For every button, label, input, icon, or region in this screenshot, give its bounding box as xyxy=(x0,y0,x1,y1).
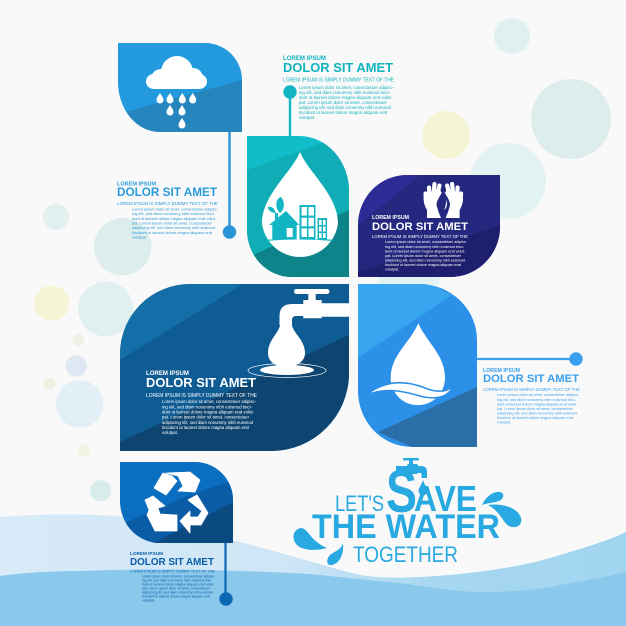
text block: right: Lorem ipsum dolor sit amet, consectetuer adipisc- xyxy=(497,393,580,397)
text block: bottom left: pat. Lorem ipsum dolor sit amet, consectetuer xyxy=(142,586,211,590)
text block: faucet panel xyxy=(146,370,258,435)
text block: left: adipiscing elit, sed diam nonummy nibh euismod xyxy=(132,225,215,230)
text block: faucet panel: DOLOR SIT AMET xyxy=(146,375,256,390)
text block: top center: volutpat. xyxy=(299,115,315,120)
text block: faucet panel: dunt ut laoreet dolore magna aliquam erat volut- xyxy=(162,410,255,414)
text block: left: LOREM IPSUM IS SIMPLY DUMMY TEXT OF THE xyxy=(117,201,218,206)
text block: right: volutpat. xyxy=(497,420,511,424)
text block: right: dunt ut laoreet dolore magna aliquam erat volut- xyxy=(497,402,578,406)
panel: recycle leaf xyxy=(120,462,233,543)
icon: rain cloud xyxy=(146,56,207,128)
text block: left: ing elit, sed diam nonummy nibh euismod tinci- xyxy=(132,211,216,216)
text block: top center: LOREM IPSUM IS SIMPLY DUMMY TEXT OF THE xyxy=(283,78,395,84)
text block: bottom left: volutpat. xyxy=(142,598,155,602)
text block: navy panel xyxy=(372,215,468,272)
text block: faucet panel: pat. Lorem ipsum dolor sit amet, consectetuer xyxy=(162,415,250,420)
text block: top center: pat. Lorem ipsum dolor sit amet, consectetuer xyxy=(299,100,388,105)
text block: top center: LOREM IPSUM xyxy=(283,55,326,62)
text block: top center: ing elit, sed diam nonummy nibh euismod tinci- xyxy=(299,90,391,95)
icon: faucet on S xyxy=(396,458,427,478)
text block: bottom left: Lorem ipsum dolor sit amet, consectetuer adipisc- xyxy=(142,574,215,578)
text block: navy panel: pat. Lorem ipsum dolor sit amet, consectetuer xyxy=(385,254,462,258)
text block: right: adipiscing elit, sed diam nonummy nibh euismod xyxy=(497,411,577,415)
text block: navy panel: LOREM IPSUM IS SIMPLY DUMMY TEXT OF THE xyxy=(372,234,468,239)
text block: faucet panel: LOREM IPSUM xyxy=(146,370,189,377)
text block: right: LOREM IPSUM IS SIMPLY DUMMY TEXT OF THE xyxy=(483,387,580,392)
text block: right: ing elit, sed diam nonummy nibh euismod tinci- xyxy=(497,398,577,402)
text block: top center: DOLOR SIT AMET xyxy=(283,60,393,75)
text block: left: DOLOR SIT AMET xyxy=(117,186,218,199)
text block: bottom left: adipiscing elit, sed diam nonummy nibh euismod xyxy=(142,590,213,594)
text block: top center xyxy=(283,55,395,120)
connector lines and dots xyxy=(219,85,583,606)
icon: splash drops xyxy=(294,492,521,565)
slogan: let's save the water together xyxy=(294,458,521,567)
text block: top center: adipiscing elit, sed diam nonummy nibh euismod xyxy=(299,105,392,110)
text block: navy panel: LOREM IPSUM xyxy=(372,215,409,221)
text block: navy panel: adipiscing elit, sed diam nonummy nibh euismod xyxy=(385,258,465,262)
icon: recycling arrows xyxy=(145,472,208,533)
text block: navy panel: Lorem ipsum dolor sit amet, consectetuer adipisc- xyxy=(385,240,468,244)
text block: left: volutpat. xyxy=(132,234,147,240)
text block: faucet panel: adipiscing elit, sed diam nonummy nibh euismod xyxy=(162,420,254,425)
slogan: let's save the water together: TOGETHER xyxy=(353,542,458,567)
text block: faucet panel: Lorem ipsum dolor sit amet, consectetuer adipisc- xyxy=(162,399,257,404)
text block: faucet panel: ing elit, sed diam nonummy nibh euismod tinci- xyxy=(162,404,253,409)
icon: drop with house and city xyxy=(262,152,338,257)
water waves xyxy=(0,514,626,626)
text block: left xyxy=(117,182,219,240)
text block: left: Lorem ipsum dolor sit amet, consectetuer adipisc- xyxy=(132,206,219,212)
background bubbles xyxy=(34,18,611,501)
text block: navy panel: tincidunt ut laoreet dolore magna aliquam erat xyxy=(385,263,462,267)
panel: home leaf xyxy=(247,136,349,277)
icon: cupped hands with drop xyxy=(424,184,463,218)
text block: navy panel: DOLOR SIT AMET xyxy=(372,221,468,233)
text block: faucet panel: volutpat. xyxy=(162,430,178,435)
text block: bottom left: dunt ut laoreet dolore magna aliquam erat volut- xyxy=(142,582,214,586)
text block: bottom left: LOREM IPSUM xyxy=(130,551,163,557)
text block: bottom left: LOREM IPSUM IS SIMPLY DUMMY TEXT OF THE xyxy=(130,569,215,574)
text block: top center: Lorem ipsum dolor sit amet, consectetuer adipisc- xyxy=(299,85,395,90)
text block: bottom left: tincidunt ut laoreet dolore magna aliquam erat xyxy=(142,594,210,598)
text block: left: dunt ut laoreet dolore magna aliquam erat volut- xyxy=(132,216,217,221)
text block: right: LOREM IPSUM xyxy=(483,368,520,374)
text block: left: LOREM IPSUM xyxy=(117,182,156,188)
slogan: let's save the water together: THE WATER xyxy=(312,508,500,546)
panel: rain leaf xyxy=(118,43,242,132)
text block: faucet panel: LOREM IPSUM IS SIMPLY DUMMY TEXT OF THE xyxy=(146,393,258,399)
panel: navy hands leaf xyxy=(358,175,500,277)
text block: bottom left: DOLOR SIT AMET xyxy=(130,557,214,568)
slogan: let's save the water together: S xyxy=(386,458,417,525)
text block: right: pat. Lorem ipsum dolor sit amet, consectetuer xyxy=(497,407,574,411)
panel: water drop leaf xyxy=(358,284,477,447)
text block: bottom left: ing elit, sed diam nonummy nibh euismod tinci- xyxy=(142,578,212,582)
icon: drop above A xyxy=(418,480,428,496)
icon: faucet dripping xyxy=(248,289,349,378)
icon: drop on wave xyxy=(366,323,453,405)
slogan: let's save the water together: LET'S xyxy=(335,491,384,516)
text block: navy panel: ing elit, sed diam nonummy nibh euismod tinci- xyxy=(385,245,465,249)
text block: navy panel: dunt ut laoreet dolore magna aliquam erat volut- xyxy=(385,249,466,253)
text block: top center: dunt ut laoreet dolore magna aliquam erat volut- xyxy=(299,95,393,100)
slogan: let's save the water together: AVE xyxy=(414,478,477,519)
text block: faucet panel: tincidunt ut laoreet dolore magna aliquam erat xyxy=(162,425,250,430)
text block: left: tincidunt ut laoreet dolore magna aliquam erat xyxy=(132,230,213,235)
text block: navy panel: volutpat. xyxy=(385,268,399,272)
text block: bottom left xyxy=(130,551,215,602)
text block: top center: tincidunt ut laoreet dolore magna aliquam erat xyxy=(299,110,388,115)
text block: left: pat. Lorem ipsum dolor sit amet, consectetuer xyxy=(132,220,213,226)
text block: right: DOLOR SIT AMET xyxy=(483,373,579,385)
panel: faucet leaf xyxy=(120,284,349,451)
text block: right xyxy=(483,368,580,424)
text block: right: tincidunt ut laoreet dolore magna aliquam erat xyxy=(497,416,574,420)
